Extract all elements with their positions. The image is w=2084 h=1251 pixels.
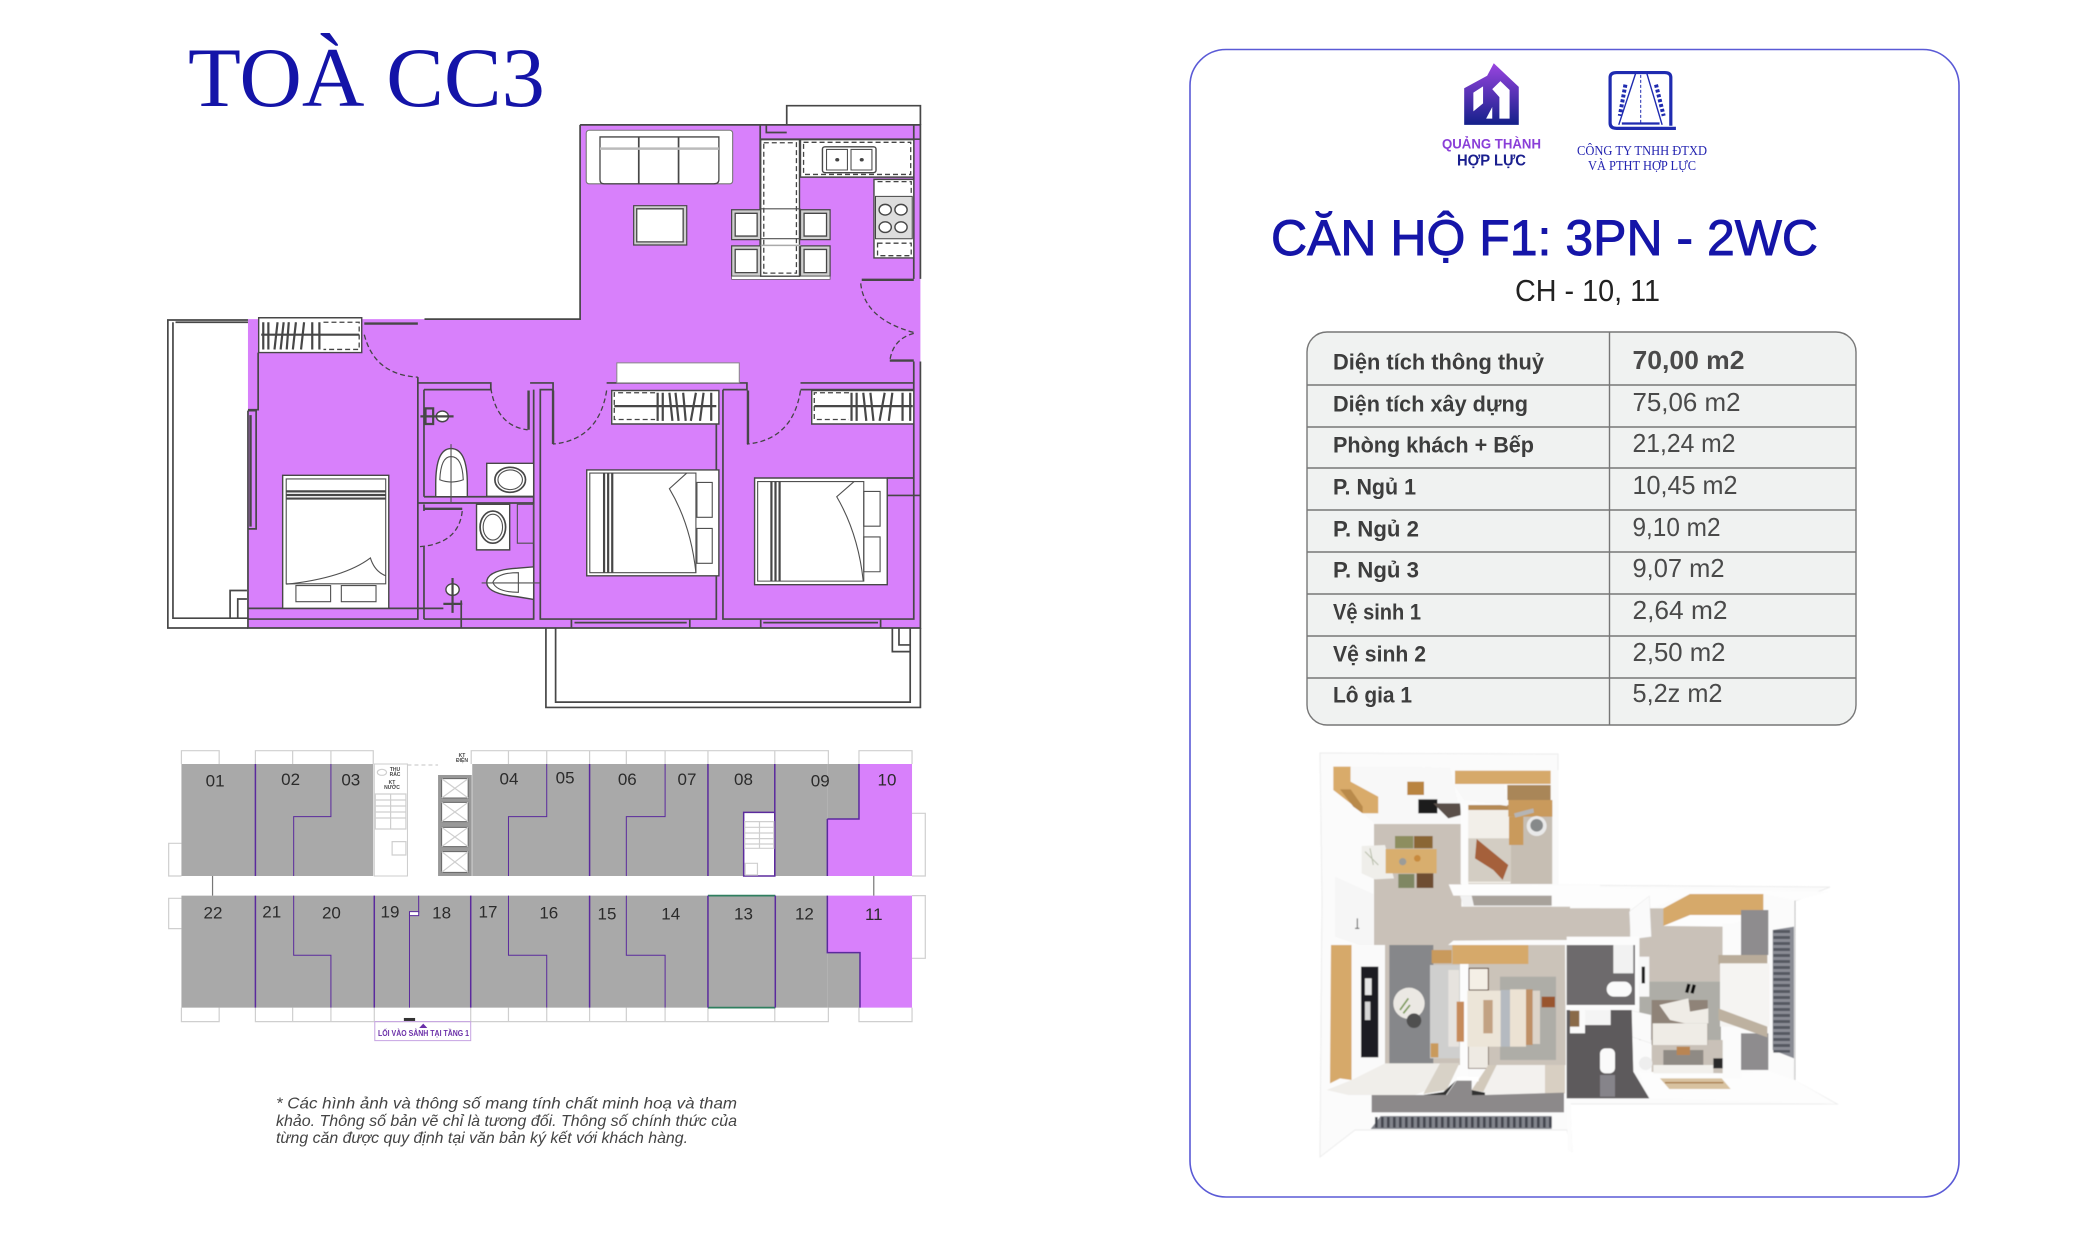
bedroom floor [1639,908,1723,1008]
subheading: CH - 10, 11 [1515,273,1660,308]
key plan [169,751,925,1041]
core small labels: THU [390,767,401,773]
pillars [1723,923,1741,955]
horizontal wall [1449,884,1600,907]
unit dividers [213,764,874,1008]
disclaimer note: khảo. Thông số bản vẽ chỉ là tương đối. Thông số chính thức của [276,1113,737,1130]
railing [1371,1116,1552,1129]
unit numbers: 08 [734,770,753,789]
logo: Quang Thanh Hop Luc: HỢP LỰC [1457,152,1526,170]
coffee tables [1393,988,1425,1019]
nightstands [1469,968,1488,990]
logo: Hop Luc company: VÀ PTHT HỢP LỰC [1588,158,1696,173]
walls [248,125,920,628]
shaft white block [617,363,739,383]
left wall panels [1335,877,1373,950]
row labels: Diện tích thông thuỷ [1333,350,1544,374]
core small labels [384,753,468,791]
curtains [1718,955,1767,964]
unit 13 outline [708,896,775,1008]
entrance marker [375,1018,471,1041]
wall art [1639,957,1649,997]
unit numbers [204,769,896,924]
3D apartment render [1320,753,1837,1157]
south-west wing: living room, master bedroom, loggia [1327,945,1572,1152]
study desk and shelving [1455,771,1551,784]
right wall [1565,945,1572,1152]
disclaimer note: từng căn được quy định tại văn bản ký kết với khách hàng. [276,1130,688,1147]
wall between [1460,963,1468,1077]
unit numbers: 07 [678,770,696,789]
row values: 10,45 m2 [1632,470,1738,500]
row values: 2,50 m2 [1632,637,1726,667]
core small labels: NƯỚC [384,783,400,791]
unit numbers: 21 [262,902,281,921]
dining set [732,140,830,279]
row values: 75,06 m2 [1632,387,1740,417]
balcony floor [1741,910,1768,955]
bed 2 [587,470,719,576]
south-east wing: bathrooms, right bedroom [1567,887,1836,1104]
row labels: Phòng khách + Bếp [1333,432,1534,458]
kitchen cabinets [1351,767,1462,824]
stair cut-out at unit 08 [744,812,775,876]
master bed [1467,991,1502,1047]
unit numbers: 13 [734,904,753,923]
unit numbers: 04 [500,769,518,788]
lift core [407,765,472,876]
sofa [586,130,733,184]
bathroom 1 [1567,937,1639,1008]
wardrobe 1 [259,318,362,353]
marble island [1362,845,1394,879]
closets [1629,896,1651,939]
icon: road mark [1610,73,1676,128]
north wing: kitchen, dining, study [1333,767,1600,960]
coffee table [634,206,687,245]
row labels: Lô gia 1 [1333,682,1412,708]
loggia floor [1372,1081,1564,1112]
kitchen shelf [1333,767,1378,813]
area table [1307,332,1856,725]
floor strip [1385,945,1460,1065]
unit numbers: 02 [281,770,300,789]
row labels: P. Ngủ 2 [1333,516,1419,542]
logo: Quang Thanh Hop Luc [1442,63,1541,170]
unit numbers: 09 [811,772,830,791]
panel: apartment info [1190,50,1959,1197]
corridor [1570,908,1630,938]
row labels [1333,350,1544,708]
row values: 70,00 m2 [1632,345,1744,375]
unit numbers: 22 [204,903,222,922]
study floor and wall [1468,805,1552,884]
row values: 5,2z m2 [1632,678,1722,708]
unit numbers: 17 [479,902,497,921]
stove [874,179,914,258]
bed 3 [755,478,887,585]
right bed [1652,1000,1708,1045]
south floor white [1638,1071,1836,1104]
entrance label: LỐI VÀO SẢNH TẠI TẦNG 1 [378,1027,469,1038]
bathroom 1 fixtures [420,408,534,502]
top wall band [1570,887,1830,908]
balcony outlines [169,751,925,1022]
unit numbers: 01 [206,772,225,791]
highlighted unit 10 [827,764,912,876]
unit numbers: 19 [381,902,399,921]
bedroom floor [1468,945,1566,1065]
left window [1327,1063,1459,1095]
right window [1472,1065,1565,1095]
wardrobe [1452,945,1528,964]
unit numbers: 14 [661,904,680,923]
row labels: P. Ngủ 3 [1333,558,1419,582]
highlighted unit 11 [827,896,912,1008]
gray units top row [181,764,859,876]
unit numbers: 15 [598,904,616,923]
unit numbers: 11 [865,905,883,924]
living rug [1389,945,1433,1063]
TV wall [1330,945,1352,1083]
core small labels: RÁC [390,771,401,778]
row values: 9,10 m2 [1632,512,1720,542]
core small labels: KT [389,780,395,786]
bathroom 2 fixtures [443,504,540,613]
core small labels: KT [459,753,465,759]
kitchen counter and sink [801,140,914,177]
bed 1 [283,475,389,608]
row labels: Diện tích xây dựng [1333,392,1528,416]
service core left [374,764,407,876]
row labels: P. Ngủ 1 [1333,474,1416,500]
doors [364,283,914,547]
logo name: QUẢNG THÀNH [1442,136,1541,152]
row values: 9,07 m2 [1632,553,1724,583]
balconies [168,106,920,707]
white shell [1320,753,1837,1157]
unit numbers: 06 [618,770,637,789]
disclaimer note [276,1096,737,1147]
title: TOÀ CC3 [188,31,545,125]
wardrobe 3 [812,391,914,424]
unit numbers: 03 [341,771,360,790]
row values: 2,64 m2 [1632,595,1728,625]
heading: CĂN HỘ F1: 3PN - 2WC [1271,210,1818,266]
gray units bottom row [181,896,860,1008]
bathroom 2 [1567,1010,1649,1098]
study bed [1468,805,1508,810]
purple apartment area [248,125,920,628]
logo: Hop Luc company [1577,73,1707,173]
company name: CÔNG TY TNHH ĐTXD [1577,143,1707,158]
unit numbers: 16 [539,903,558,922]
corridor and dining floor [1374,824,1600,960]
row values: 21,24 m2 [1632,428,1736,458]
dining table and chairs [1386,849,1437,873]
unit numbers: 05 [556,769,575,788]
icon: building mark [1464,63,1519,125]
unit numbers: 18 [432,903,451,922]
disclaimer note: * Các hình ảnh và thông số mang tính chất minh hoạ và tham [276,1096,737,1112]
row values [1632,345,1744,708]
side railing [1773,927,1794,1058]
floor plan [168,106,920,707]
row labels: Vệ sinh 2 [1333,642,1426,666]
stairs in unit 08 [745,822,774,875]
unit numbers: 20 [322,903,341,922]
unit numbers: 12 [795,904,814,923]
unit numbers: 10 [878,771,896,790]
row labels: Vệ sinh 1 [1333,600,1421,624]
core small labels: ĐIỆN [456,756,468,764]
wardrobe 2 [612,391,719,424]
wardrobe [1663,894,1763,926]
sofa [1430,965,1460,1058]
